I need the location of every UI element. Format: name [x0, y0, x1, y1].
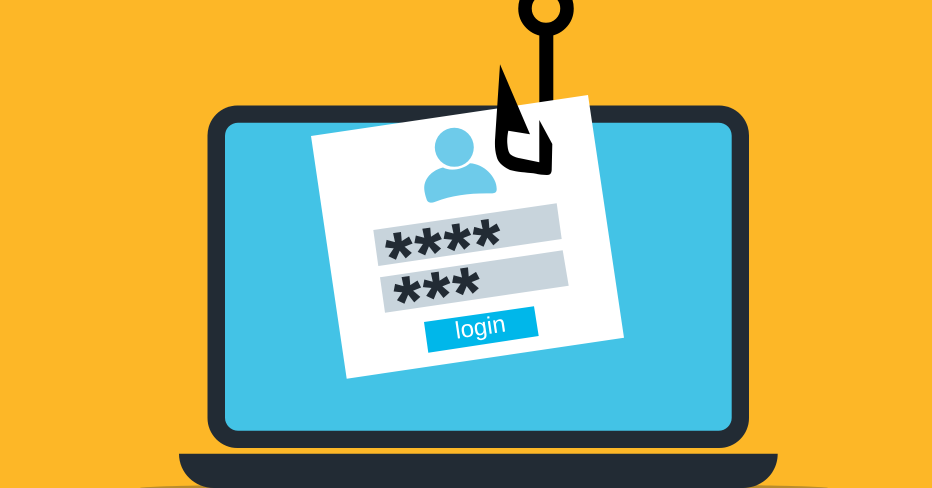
hook eye and shank [525, 0, 567, 105]
login card [311, 95, 624, 379]
password field one [373, 203, 562, 266]
laptop screen [225, 123, 732, 431]
icon: user avatar [424, 128, 497, 203]
laptop shadow [140, 484, 828, 488]
login label: login [453, 311, 507, 345]
laptop lid [208, 106, 749, 448]
card sheet [311, 95, 624, 379]
masked characters one: **** [381, 203, 510, 297]
masked characters two: *** [390, 251, 489, 341]
password field two [380, 250, 569, 313]
login button [424, 306, 539, 353]
laptop base [179, 454, 778, 488]
hook point [495, 64, 552, 175]
